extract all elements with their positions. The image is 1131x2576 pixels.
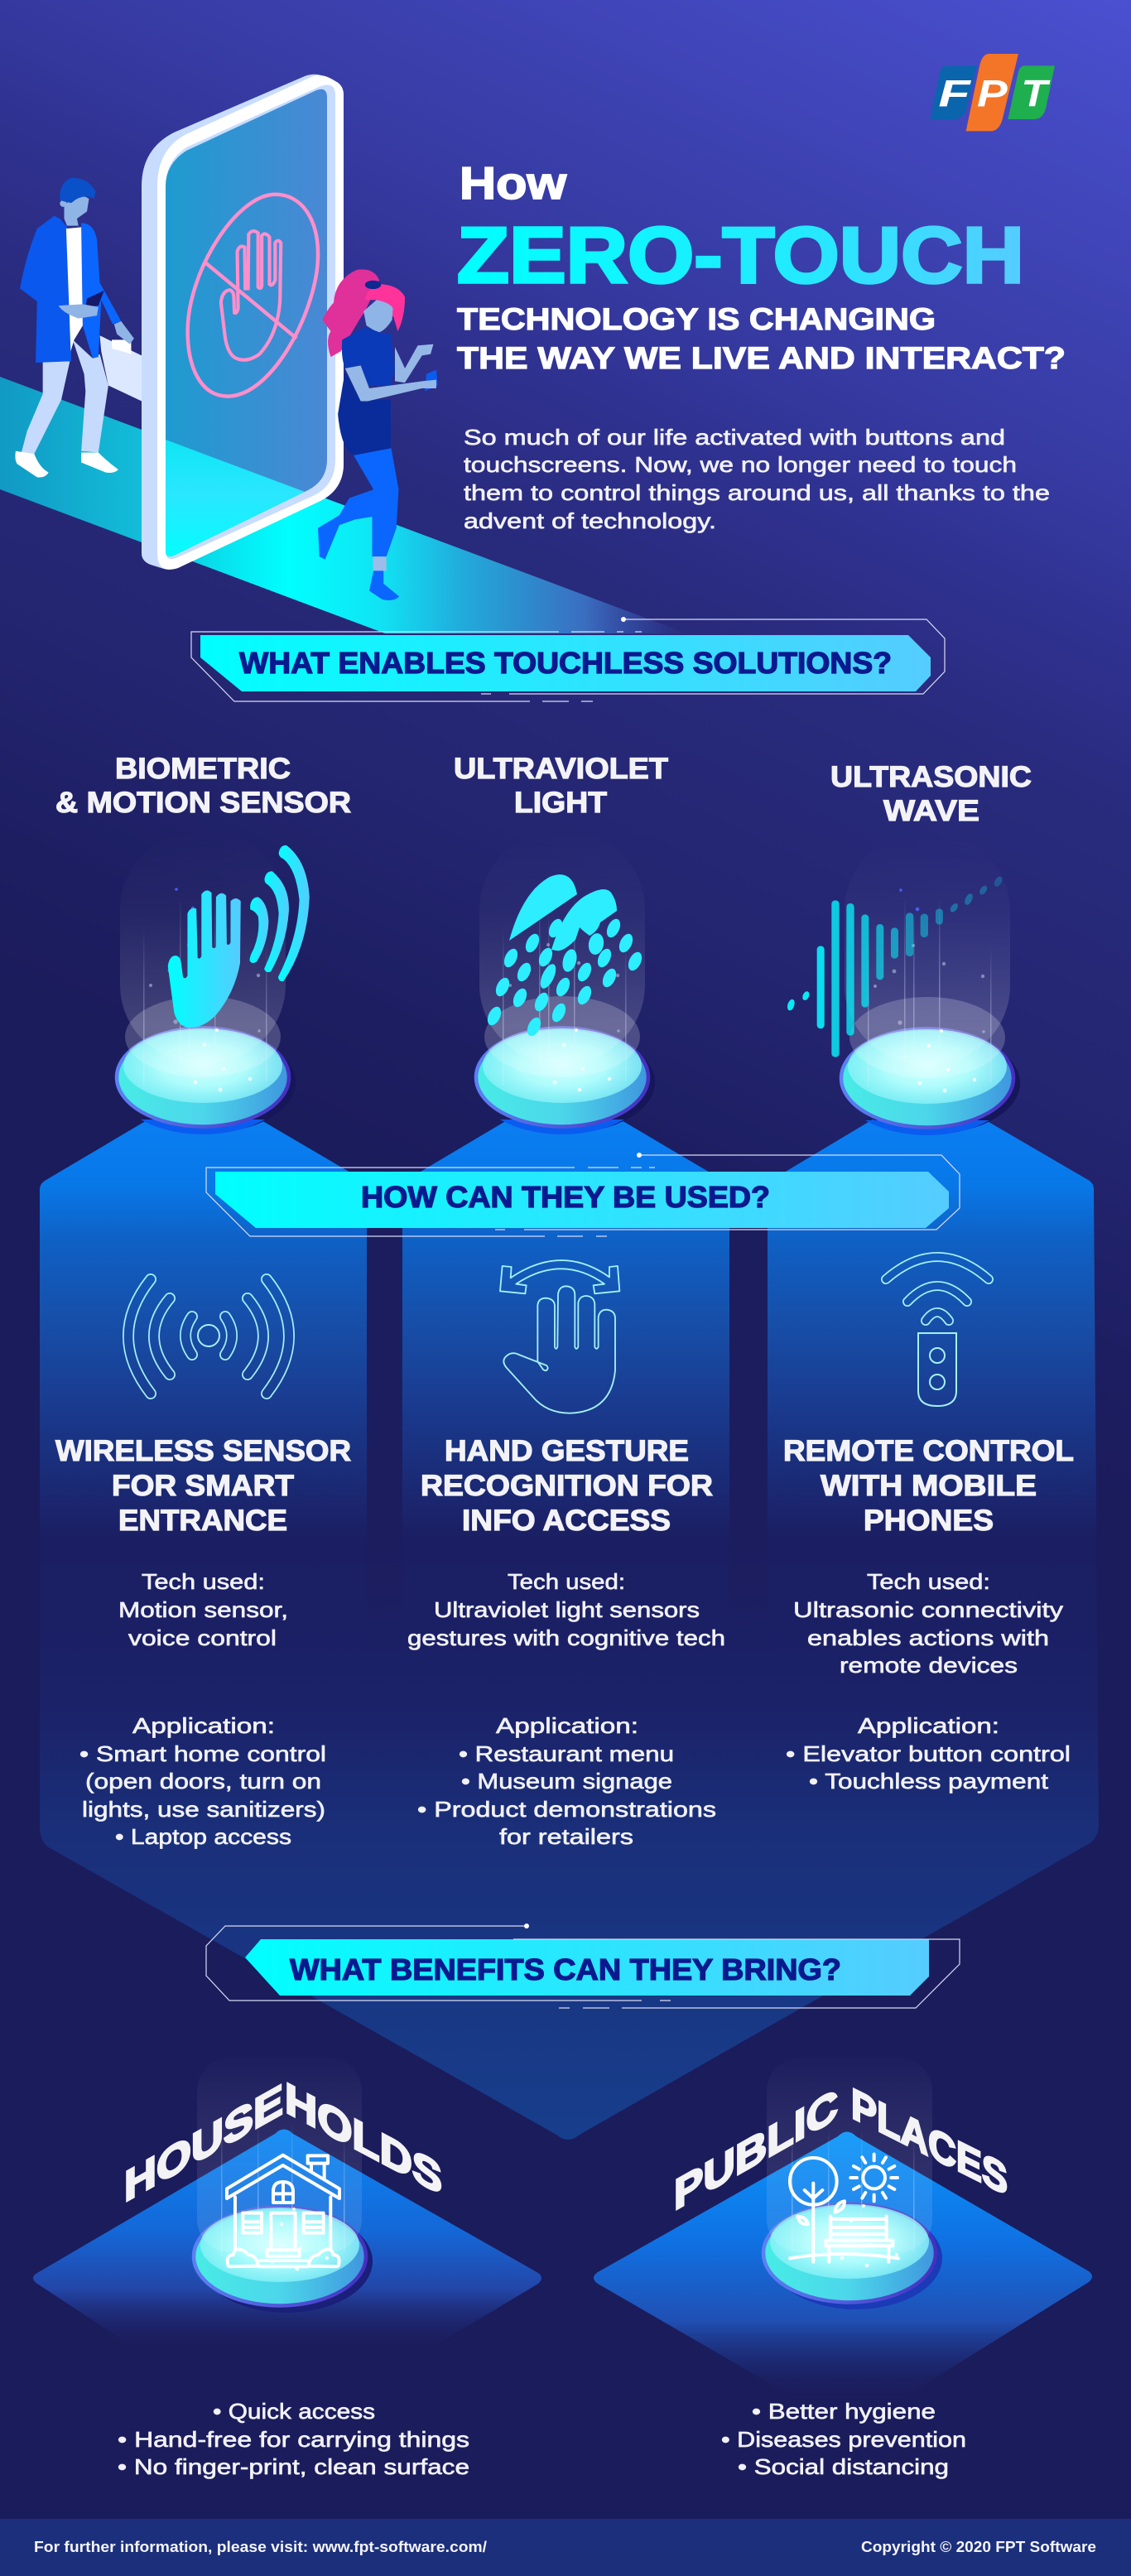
column 3 text: remote control: PHONES [864, 1505, 994, 1537]
footer: Copyright © 2020 FPT Software [861, 2539, 1096, 2555]
footer: For further information, please visit: www.fpt-software.com/ [34, 2539, 487, 2555]
list: household benefits: • Quick access [213, 2399, 375, 2424]
intro paragraph: touchscreens. Now, we no longer need to touch [464, 452, 1017, 477]
title [457, 157, 1066, 375]
column 2 text: hand gesture recognition: • Product demonstrations [417, 1797, 716, 1822]
icon: hand with sensor waves on platform [116, 831, 310, 1134]
panel: households platform [33, 2058, 541, 2368]
column 2 text: hand gesture recognition: • Museum signage [461, 1769, 672, 1794]
logo: FPT: P [977, 72, 1008, 114]
column 1 text: wireless sensor: • Laptop access [115, 1824, 291, 1849]
column 1 text: wireless sensor: WIRELESS SENSOR [55, 1435, 351, 1467]
icon: tree, sun and bench [790, 2155, 898, 2262]
column 1 text: wireless sensor [55, 1435, 351, 1849]
column 3 text: remote control: REMOTE CONTROL [783, 1435, 1074, 1467]
column 2 text: hand gesture recognition [407, 1435, 725, 1849]
column 1 text: wireless sensor: lights, use sanitizers) [82, 1797, 325, 1822]
heading: ultrasonic wave: ULTRASONIC [830, 761, 1032, 793]
heading: public places (peaked lettering): PUBLIC [674, 2078, 838, 2220]
logo: FPT [930, 54, 1055, 131]
banner: how can they be used: HOW CAN THEY BE USED? [361, 1180, 770, 1214]
title: ZERO-TOUCH [457, 211, 1024, 300]
column 2 text: hand gesture recognition: • Restaurant menu [459, 1741, 674, 1766]
intro paragraph: So much of our life activated with buttons and [464, 425, 1005, 450]
title: How [460, 157, 566, 209]
banner: how can they be used [206, 1153, 960, 1236]
heading: biometric and motion sensor: & MOTION SENSOR [55, 787, 351, 819]
heading: public places (peaked lettering): PLACES [851, 2078, 1008, 2205]
heading: ultrasonic wave: WAVE [883, 795, 979, 827]
column 2 text: hand gesture recognition: HAND GESTURE [445, 1435, 689, 1467]
list: public place benefits: • Diseases prevention [721, 2427, 966, 2452]
banner: what benefits can they bring [206, 1924, 960, 2008]
column 1 text: wireless sensor: Motion sensor, [118, 1597, 288, 1622]
logo: FPT: T [1021, 72, 1052, 114]
column 3 text: remote control: • Touchless payment [809, 1769, 1049, 1794]
list: public place benefits: • Better hygiene [752, 2399, 936, 2424]
column 2 text: hand gesture recognition: RECOGNITION FOR [421, 1470, 713, 1502]
heading: households (peaked lettering): HOLDS [285, 2073, 442, 2204]
icon: house [227, 2155, 339, 2266]
column 3 text: remote control: Ultrasonic connectivity [793, 1597, 1063, 1622]
intro paragraph: them to control things around us, all thanks to the [464, 480, 1050, 505]
footer [0, 2519, 1131, 2576]
column 2 text: hand gesture recognition: Tech used: [508, 1569, 625, 1594]
column 1 text: wireless sensor: (open doors, turn on [85, 1769, 321, 1794]
column 2 text: hand gesture recognition: Ultraviolet light sensors [434, 1597, 700, 1622]
banner: what benefits can they bring: WHAT BENEFITS CAN THEY BRING? [290, 1952, 841, 1986]
heading: public places (peaked lettering) [674, 2078, 1008, 2220]
list: public place benefits: • Social distancing [738, 2454, 949, 2479]
light floor band [0, 377, 687, 633]
title: TECHNOLOGY IS CHANGING [457, 302, 936, 336]
list: household benefits: • No finger-print, clean surface [118, 2454, 469, 2479]
illustration: woman with pink hair [318, 269, 438, 600]
column 2 text: hand gesture recognition: INFO ACCESS [462, 1505, 671, 1537]
heading: households (peaked lettering): HOUSE [124, 2074, 283, 2212]
illustration: giant phone screen with no-touch sign [142, 75, 344, 580]
banner: what enables touchless solutions: WHAT ENABLES TOUCHLESS SOLUTIONS? [239, 646, 892, 680]
column 1 text: wireless sensor: voice control [128, 1625, 277, 1650]
column 3 text: remote control: • Elevator button control [786, 1741, 1071, 1766]
intro paragraph [464, 425, 1050, 533]
icon: ultraviolet light drops on platform [475, 831, 655, 1134]
column 3 text: remote control: Tech used: [867, 1569, 990, 1594]
heading: biometric and motion sensor [55, 753, 351, 819]
column 3 text: remote control: Application: [858, 1713, 999, 1738]
title: THE WAY WE LIVE AND INTERACT? [457, 341, 1066, 375]
column 1 text: wireless sensor: Tech used: [142, 1569, 265, 1594]
panel: public places platform [594, 2058, 1092, 2393]
icon: ultrasonic wave bars on platform [786, 832, 1020, 1135]
icon: wireless signal [128, 1279, 289, 1394]
heading: ultraviolet light [454, 753, 668, 819]
column 1 text: wireless sensor: FOR SMART [112, 1470, 294, 1502]
heading: ultrasonic wave [830, 761, 1032, 827]
list: public place benefits [721, 2399, 966, 2479]
intro paragraph: advent of technology. [464, 508, 716, 533]
column 3 text: remote control: enables actions with [807, 1625, 1049, 1650]
column 2 text: hand gesture recognition: Application: [496, 1713, 638, 1738]
column 3 text: remote control [783, 1435, 1074, 1794]
heading: ultraviolet light: LIGHT [514, 787, 607, 819]
heading: ultraviolet light: ULTRAVIOLET [454, 753, 668, 785]
column 3 text: remote control: remote devices [840, 1653, 1018, 1678]
logo: FPT: F [938, 72, 971, 114]
list: household benefits [118, 2399, 469, 2479]
heading: biometric and motion sensor: BIOMETRIC [115, 753, 291, 785]
icon: hand gesture with arrows [500, 1260, 619, 1413]
column 1 text: wireless sensor: Application: [132, 1713, 275, 1738]
column 2 text: hand gesture recognition: for retailers [499, 1824, 633, 1849]
illustration: man with briefcase [15, 178, 142, 478]
panel: blue usage columns [40, 1119, 1099, 2140]
column 2 text: hand gesture recognition: gestures with cognitive tech [407, 1625, 725, 1650]
column 1 text: wireless sensor: • Smart home control [79, 1741, 326, 1766]
banner: what enables touchless solutions [191, 617, 945, 701]
column 1 text: wireless sensor: ENTRANCE [118, 1505, 287, 1537]
list: household benefits: • Hand-free for carrying things [118, 2427, 469, 2452]
icon: remote control with signal [886, 1257, 989, 1406]
column 3 text: remote control: WITH MOBILE [821, 1470, 1037, 1502]
heading: households (peaked lettering) [124, 2073, 442, 2212]
